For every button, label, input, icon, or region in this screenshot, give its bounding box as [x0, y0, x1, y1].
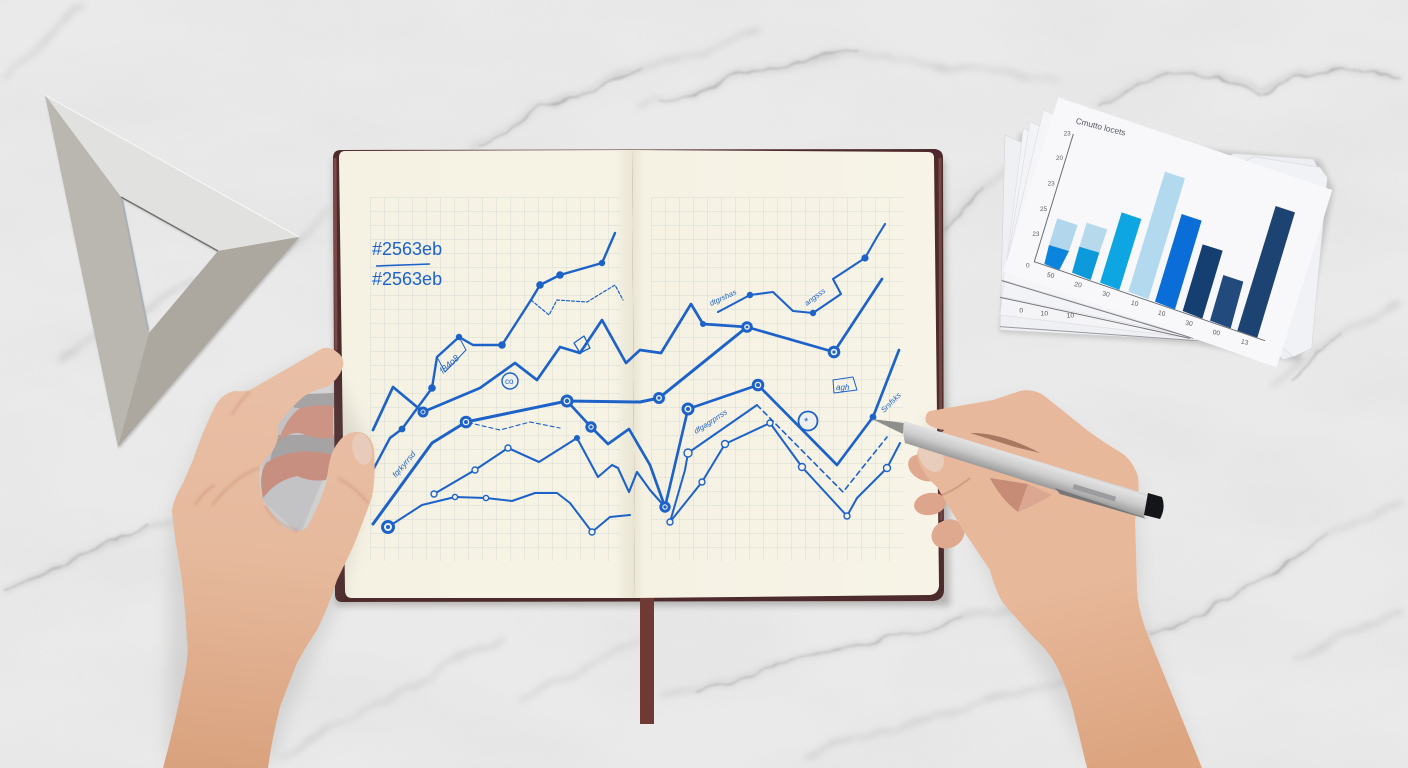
handwritten legend: #2563eb — [372, 269, 442, 289]
back card right — [1133, 153, 1321, 360]
line: dotted secondary — [531, 285, 623, 315]
thumb crease — [942, 478, 970, 495]
pen body — [903, 421, 1150, 518]
curled fingers — [903, 449, 945, 487]
lower card axis labels — [1019, 308, 1074, 319]
handwritten annotations: co — [505, 377, 514, 386]
middle finger — [278, 405, 333, 442]
line: lowest left — [388, 493, 630, 532]
card edge lines — [1000, 281, 1197, 341]
x axis labels: 10 — [1130, 300, 1139, 308]
notebook cover — [333, 149, 944, 602]
pen clip — [1055, 488, 1147, 519]
pen — [872, 419, 1164, 519]
line: second trend — [373, 279, 882, 430]
handwritten annotations: Srsfsks — [879, 390, 903, 414]
x axis labels: 10 — [1157, 310, 1166, 318]
y axis labels: 20 — [1056, 155, 1064, 162]
top chart card — [1003, 97, 1332, 367]
handwritten annotations: fqrkyrrsd — [391, 449, 418, 479]
x axis labels: 30 — [1102, 290, 1111, 299]
bars — [1044, 172, 1295, 338]
left hand — [163, 348, 375, 768]
x axis labels: 30 — [1185, 320, 1194, 328]
thumb nail — [913, 436, 949, 476]
handwritten annotations: * — [804, 416, 809, 428]
handwritten legend — [372, 239, 442, 289]
lower card axis labels: 0 — [1019, 308, 1023, 315]
line: dashed right — [757, 405, 887, 492]
pen cap — [1144, 493, 1164, 519]
chart markers — [382, 323, 839, 532]
handwritten annotations: agh — [836, 383, 850, 392]
back card left mid — [1000, 128, 1233, 338]
annotation boxes — [437, 337, 857, 393]
small point markers — [386, 254, 876, 529]
knuckle shading — [195, 392, 368, 531]
line: fourth trend — [434, 438, 665, 507]
lower card axis labels: 10 — [1067, 312, 1074, 319]
line: zigzag — [567, 350, 899, 507]
pen tip — [872, 419, 904, 434]
shadow gap between fingers and thumb — [262, 396, 334, 535]
line: dashed middle left — [432, 422, 560, 442]
left page — [339, 150, 635, 598]
y axis labels: 23 — [1064, 130, 1071, 137]
y axis labels — [1026, 130, 1071, 269]
set square ruler — [45, 95, 300, 449]
y axis labels: 25 — [1040, 206, 1048, 213]
y axis labels: 0 — [1026, 262, 1030, 269]
handwritten legend: #2563eb — [372, 239, 442, 259]
back card top — [1003, 110, 1300, 343]
x axis labels: 20 — [1074, 281, 1083, 290]
handwritten annotations: dtgrshas — [708, 287, 738, 308]
x axis labels — [1046, 272, 1249, 347]
handwritten annotations: f84o8 — [438, 353, 461, 375]
hand-drawn blue line chart — [373, 224, 900, 535]
chart title: Cmutto locets — [1075, 116, 1127, 138]
hand and thumb — [163, 348, 375, 768]
handwritten annotations: angsss — [803, 286, 827, 308]
x axis labels: 50 — [1046, 272, 1055, 280]
right page — [632, 150, 939, 598]
x axis labels: 13 — [1240, 338, 1249, 347]
line: lowest right — [670, 423, 900, 522]
back card 2 — [1133, 157, 1327, 357]
back card left low — [1000, 135, 1200, 341]
hand body — [917, 390, 1202, 768]
x axis labels: 00 — [1212, 329, 1221, 338]
notebook — [333, 149, 950, 606]
ring finger — [261, 451, 333, 498]
line: lower right upper — [670, 405, 757, 522]
palm shadow under pen — [990, 478, 1028, 512]
back card left upper — [1002, 122, 1267, 338]
y axis labels: 23 — [1048, 180, 1055, 187]
handwritten annotations: dfgagrprrss — [692, 407, 729, 436]
page grids — [370, 197, 620, 561]
y axis labels: 23 — [1032, 231, 1040, 238]
line: third trend — [373, 327, 747, 524]
line: upper right trace — [718, 224, 885, 313]
stack of chart cards — [1000, 97, 1333, 367]
right hand — [903, 390, 1202, 768]
lower card axis labels: 10 — [1041, 310, 1048, 317]
ribbon bookmark — [640, 598, 654, 724]
chart axes — [1034, 134, 1265, 341]
line: top left rising — [373, 233, 615, 470]
handwritten annotations — [391, 286, 903, 479]
thumb nail — [349, 431, 375, 467]
